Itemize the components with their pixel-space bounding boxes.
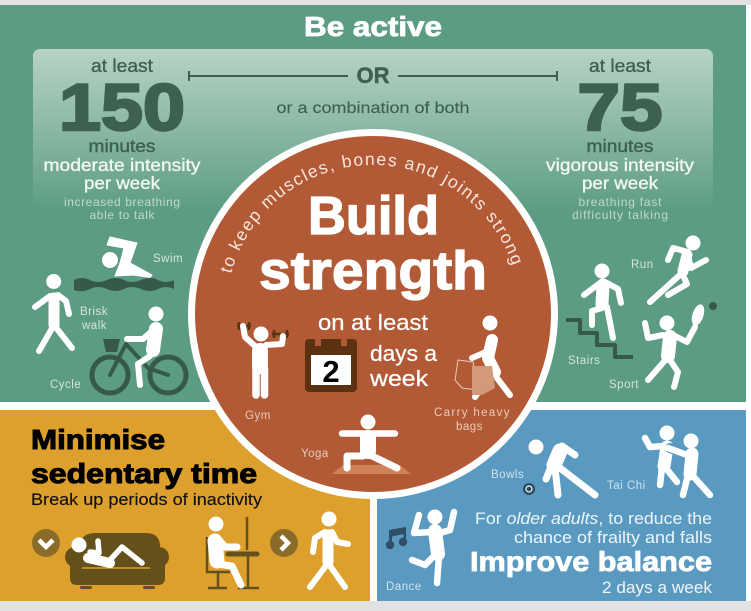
heading: build strength: strength [259, 241, 487, 301]
vigorous intensity block: 75 [578, 70, 662, 144]
guideline box [33, 49, 713, 212]
heading: minimise sedentary time [31, 424, 257, 489]
text: improve balance: chance of frailty and falls [514, 528, 712, 547]
icon: run: Run [631, 259, 654, 271]
icon: swim [74, 237, 183, 291]
icon: tai chi: Tai Chi [607, 480, 646, 492]
moderate intensity block: minutes [88, 136, 156, 156]
or connector [189, 63, 557, 117]
icon: carry heavy bags: Carry heavy [434, 407, 510, 419]
panel: improve balance [377, 410, 746, 601]
panel: minimise sedentary time [0, 410, 370, 601]
icon: stairs: Stairs [568, 355, 600, 367]
icon: cycle [50, 306, 186, 393]
vigorous intensity block: minutes [586, 136, 654, 156]
icon: walking person [310, 512, 348, 587]
text: frequency: on at least [318, 310, 428, 335]
text: improve balance: 2 days a week [602, 578, 712, 597]
icon: swim: Swim [153, 253, 183, 265]
icon: dance [386, 510, 454, 593]
moderate intensity block: able to talk [90, 208, 156, 222]
icon: brisk walk [35, 274, 108, 351]
icon: cycle: Cycle [50, 379, 81, 391]
icon: calendar [305, 339, 357, 392]
text: frequency: days a [370, 341, 438, 366]
icon: sport: Sport [609, 379, 639, 391]
moderate intensity block: at least [91, 56, 153, 76]
panel: be active [0, 5, 746, 402]
title: be active: Be active [304, 11, 442, 42]
text: frequency: week [369, 366, 429, 391]
moderate intensity block: moderate intensity [44, 155, 201, 175]
icon: right arrow [270, 529, 298, 557]
text: improve balance: Improve balance [470, 546, 712, 577]
text: improve balance [470, 509, 712, 597]
icon: yoga: Yoga [301, 448, 329, 460]
icon: person on sofa [65, 533, 169, 589]
icon: carry heavy bags [434, 316, 510, 433]
vigorous intensity block: breathing fast [578, 195, 662, 209]
icon: carry heavy bags: bags [456, 421, 483, 433]
moderate intensity block: 150 [59, 70, 185, 144]
icon: brisk walk: Brisk [80, 306, 108, 318]
icon: bowls: Bowls [491, 469, 524, 481]
heading: minimise sedentary time: sedentary time [31, 458, 257, 489]
icon: brisk walk: walk [81, 320, 107, 332]
icon: run [631, 236, 706, 302]
icon: stairs [566, 264, 633, 367]
vigorous intensity block: at least [589, 56, 651, 76]
panel: build strength circle [188, 129, 558, 499]
vigorous intensity block [546, 56, 694, 222]
or connector: or a combination of both [276, 100, 470, 117]
icon: person at desk [207, 516, 259, 588]
icon: tai chi [607, 426, 710, 495]
text: improve balance: For older adults, to reduce the [475, 509, 712, 528]
vigorous intensity block: difficulty talking [572, 208, 668, 222]
moderate intensity block [44, 56, 201, 222]
icon: gym: Gym [245, 410, 271, 422]
or connector: OR [356, 63, 390, 88]
heading: build strength [259, 186, 487, 301]
icon: gym [237, 322, 289, 422]
icon: yoga [301, 414, 411, 474]
icon: down arrow [32, 529, 60, 557]
icon: calendar: 2 [322, 354, 340, 389]
icon: dance: Dance [386, 581, 422, 593]
text: frequency [318, 310, 438, 391]
vigorous intensity block: vigorous intensity [546, 155, 694, 175]
vigorous intensity block: per week [582, 173, 658, 193]
heading: minimise sedentary time: Minimise [31, 424, 165, 455]
curved text: to keep muscles, bones and joints strong [220, 155, 521, 272]
heading: build strength: Build [308, 186, 439, 246]
icon: sport [609, 302, 717, 391]
moderate intensity block: per week [84, 173, 160, 193]
moderate intensity block: increased breathing [64, 195, 180, 209]
subheading: Break up periods of inactivity [31, 490, 263, 509]
icon: bowls [491, 440, 595, 495]
